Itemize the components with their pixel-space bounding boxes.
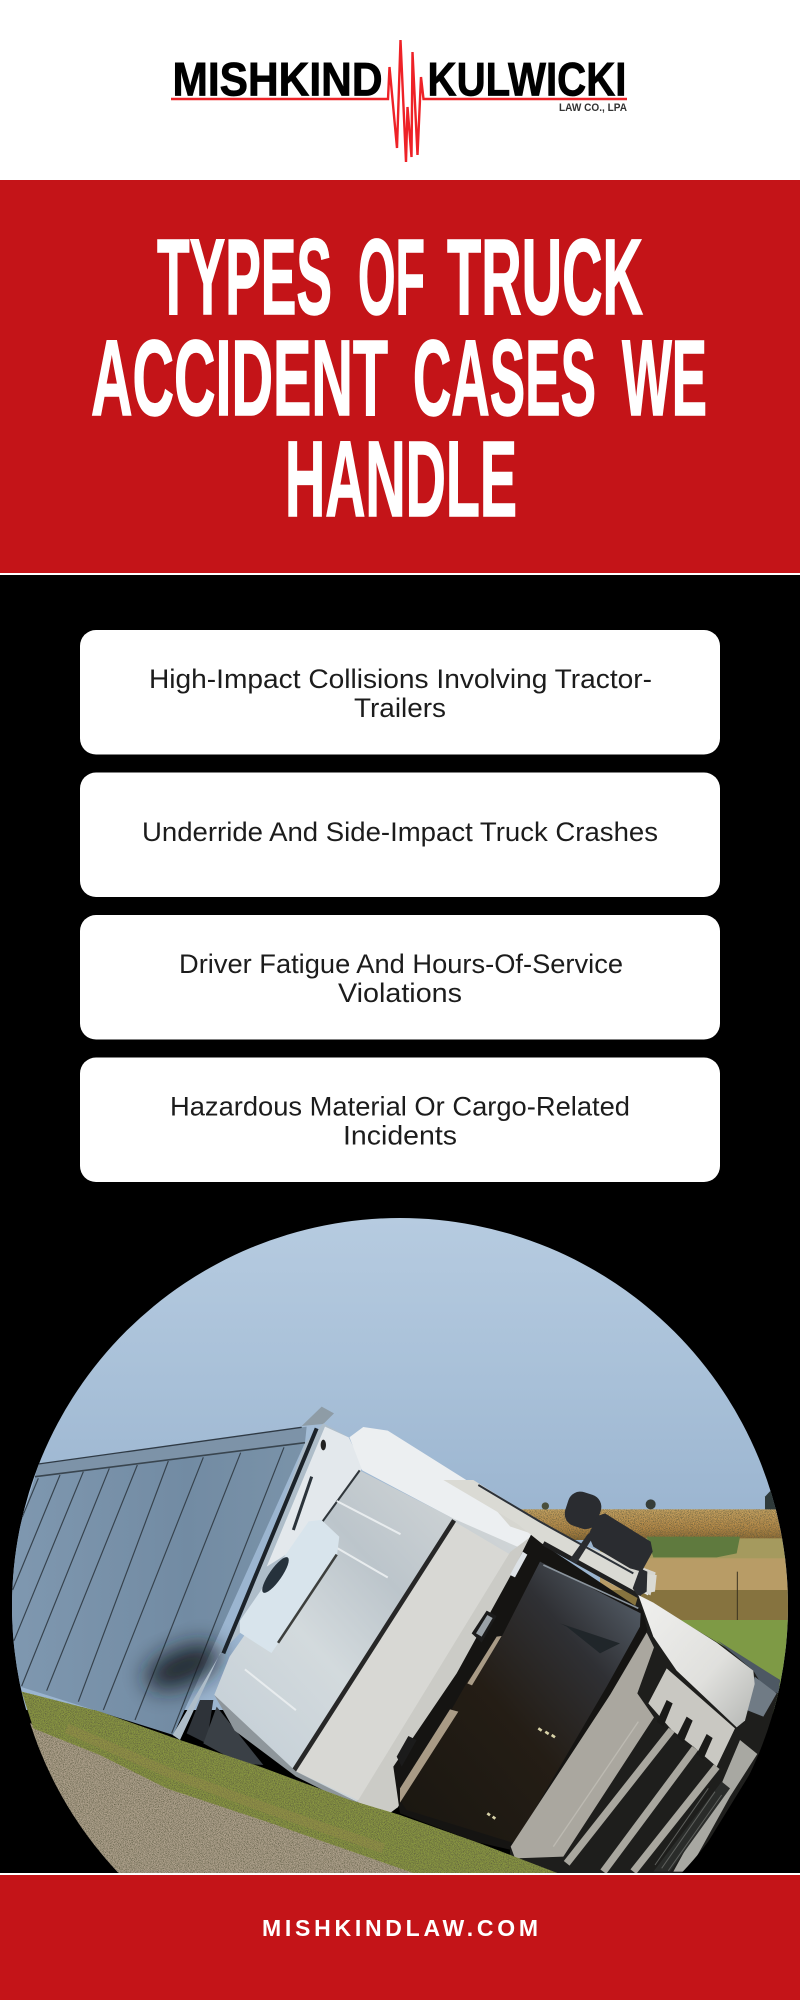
title: Types of truck accident cases we handle (91, 216, 707, 539)
front bumper panel (511, 1633, 654, 1858)
grille (648, 1668, 735, 1767)
logo: Mishkind Kulwicki (171, 40, 627, 162)
hood (717, 1640, 780, 1693)
title band (0, 180, 800, 573)
card: high-impact collisions: High-Impact Collisions Involving Tractor- (149, 664, 652, 694)
card: underride and side-impact (80, 772, 720, 897)
main black panel (0, 575, 800, 1873)
footer url: MISHKINDLAW.COM (262, 1915, 538, 1941)
ground: gravel and grass (22, 1692, 558, 1873)
windshield and front of cab (393, 1480, 780, 1877)
icon: side mirrors (561, 1488, 653, 1597)
card: hazardous material (80, 1058, 720, 1182)
logo: Mishkind Kulwicki: KULWICKI (428, 53, 626, 106)
card: driver fatigue: Violations (338, 978, 462, 1008)
card: driver fatigue: Driver Fatigue And Hours-Of-Service (179, 949, 623, 979)
backing of front end (510, 1595, 780, 1877)
cab (214, 1427, 656, 1815)
air deflector (240, 1520, 339, 1653)
logo: Mishkind Kulwicki: LAW CO., LPA (559, 102, 627, 114)
logo: Mishkind Kulwicki: MISHKIND (172, 53, 382, 106)
title: Types of truck accident cases we handle: OF (358, 216, 425, 337)
card: driver fatigue (80, 915, 720, 1040)
card: high-impact collisions (80, 630, 720, 754)
card: underride and side-impact: Underride And Side-Impact Truck Crashes (142, 817, 658, 847)
field background (513, 1491, 800, 1713)
roof edge (443, 1480, 657, 1595)
card: high-impact collisions: Trailers (354, 693, 446, 723)
card: hazardous material: Incidents (343, 1120, 457, 1150)
card: hazardous material: Hazardous Material Or Cargo-Related (170, 1092, 630, 1122)
circular photo: overturned truck (0, 1218, 800, 1900)
trailer (10, 1407, 363, 1765)
header: white logo band (0, 0, 800, 180)
footer band (0, 1873, 800, 2000)
